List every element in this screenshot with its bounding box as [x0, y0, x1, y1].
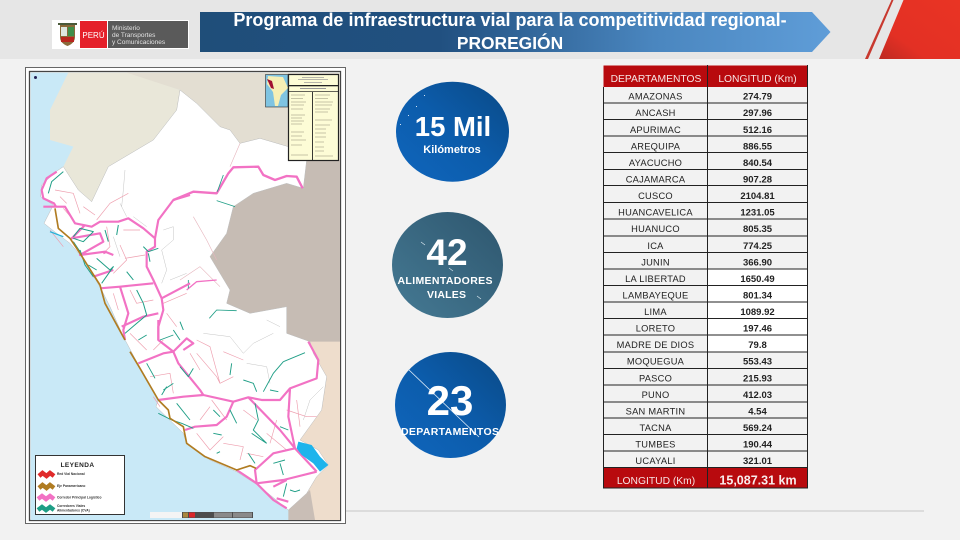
table total row: 15,087.31 km [719, 474, 797, 488]
stat circle: 15 Mil kilómetros: 15 Mil [415, 111, 491, 142]
length values: 512.16 [743, 125, 772, 136]
table: longitud por departamento [603, 65, 808, 488]
title [233, 10, 787, 53]
legend: Corredor Principal Logístico [57, 496, 102, 500]
department names: AREQUIPA [631, 141, 681, 151]
length values: 321.01 [743, 456, 773, 467]
department names: CUSCO [638, 191, 673, 201]
department names: MADRE DE DIOS [617, 340, 694, 350]
pink corridors north [42, 172, 190, 340]
department boundaries north [113, 170, 187, 283]
department names: SAN MARTIN [626, 406, 685, 416]
secondary roads south [130, 333, 317, 460]
table header [604, 66, 808, 87]
department names: ICA [647, 241, 664, 251]
feeder roads north [48, 172, 183, 333]
length values: 274.79 [743, 92, 772, 102]
length values: 2104.81 [740, 191, 775, 202]
icon: coat of arms [58, 23, 77, 46]
legend: Alimentadores (CVA) [57, 508, 90, 512]
department names: JUNIN [641, 257, 670, 267]
length values: 197.46 [743, 324, 772, 335]
secondary roads north [50, 190, 187, 327]
legend: Red Vial Nacional [57, 472, 85, 476]
stat circle: 23 departamentos [395, 352, 506, 458]
stat circle: 15 Mil kilómetros: Kilómetros [423, 144, 481, 156]
length values: 1231.05 [740, 208, 775, 219]
ministry logo: de Transportes [112, 32, 156, 39]
icon: Lake Titicaca [297, 442, 328, 472]
stat circle: 23 departamentos: DEPARTAMENTOS [401, 426, 499, 438]
length values: 4.54 [748, 406, 767, 417]
legend: LEYENDA [61, 462, 94, 469]
coastal river [50, 232, 63, 237]
table header: LONGITUD (Km) [718, 74, 797, 85]
road network: north and centre [42, 170, 190, 340]
legend swatches [38, 473, 54, 510]
inset mini map [266, 74, 288, 107]
length values: 366.90 [743, 257, 772, 268]
road network: south [130, 320, 328, 508]
department names: LA LIBERTAD [625, 274, 686, 284]
legend: Corredores Viales [57, 504, 85, 508]
eastern corridor and feeders [173, 143, 303, 318]
legend [36, 456, 124, 514]
footer rule [346, 510, 924, 512]
length values: 1089.92 [740, 307, 775, 318]
department names: LAMBAYEQUE [623, 290, 688, 300]
table grid [603, 65, 808, 488]
department names [617, 92, 694, 466]
stat circle: 42 alimentadores viales: ALIMENTADORES [398, 275, 492, 287]
map of Peru [31, 73, 340, 520]
department names: HUANCAVELICA [618, 208, 693, 218]
ministry logo [52, 20, 189, 49]
department names: AMAZONAS [628, 92, 683, 102]
length values: 190.44 [743, 440, 773, 451]
table total row [604, 467, 808, 488]
legend: Eje Panamericano [57, 484, 85, 488]
ministry logo: y Comunicaciones [112, 39, 166, 46]
department names: UCAYALI [635, 456, 676, 466]
map footer logo strip [150, 512, 253, 518]
ministry logo: PERÚ [82, 31, 105, 40]
department names: APURIMAC [630, 125, 681, 135]
length values: 297.96 [743, 108, 772, 119]
stat circle: 23 departamentos: 23 [427, 377, 473, 424]
stat circle: 15 Mil kilómetros [396, 82, 509, 182]
length values: 907.28 [743, 174, 772, 186]
department names: PUNO [642, 390, 669, 400]
length values: 412.03 [743, 390, 772, 401]
department names: LIMA [644, 307, 667, 317]
department names: HUANUCO [631, 224, 680, 234]
length values: 840.54 [743, 158, 773, 169]
department boundaries south [203, 320, 323, 420]
table body fills [707, 269, 807, 352]
brown axis north [55, 208, 125, 340]
length values [740, 92, 775, 467]
department names: LORETO [636, 324, 675, 334]
map key panel [288, 74, 338, 160]
length values: 805.35 [743, 224, 773, 235]
stat circle: 42 alimentadores viales: VIALES [427, 289, 466, 301]
department names: TUMBES [635, 440, 676, 450]
length values: 215.93 [743, 373, 772, 384]
title arrow banner [200, 10, 830, 53]
length values: 569.24 [743, 423, 773, 434]
brown axis south [130, 352, 256, 470]
map panel [26, 68, 346, 524]
table header: DEPARTAMENTOS [611, 74, 702, 85]
length values: 553.43 [743, 357, 772, 368]
department names: TACNA [639, 423, 672, 433]
department names: PASCO [639, 373, 672, 383]
department names: AYACUCHO [629, 158, 682, 168]
department names: ANCASH [635, 108, 676, 118]
length values: 79.8 [748, 340, 767, 351]
north arrow mark [34, 76, 37, 79]
stat circle: 42 alimentadores viales [392, 212, 503, 318]
ministry logo: Ministerio [112, 25, 140, 32]
table total row: LONGITUD (Km) [617, 476, 695, 487]
pink corridors south [138, 320, 318, 508]
stat circle: 42 alimentadores viales: 42 [426, 232, 468, 273]
feeder roads south [138, 330, 305, 497]
header band [0, 0, 960, 59]
length values: 886.55 [743, 141, 773, 152]
length values: 1650.49 [740, 274, 775, 285]
title: PROREGIÓN [457, 33, 563, 53]
title: Programa de infraestructura vial para la competitividad regional- [233, 10, 787, 30]
department names: CAJAMARCA [626, 174, 686, 184]
department names: MOQUEGUA [627, 357, 685, 367]
red corner accent [865, 0, 960, 59]
length values: 774.25 [743, 241, 773, 252]
length values: 801.34 [743, 290, 773, 302]
